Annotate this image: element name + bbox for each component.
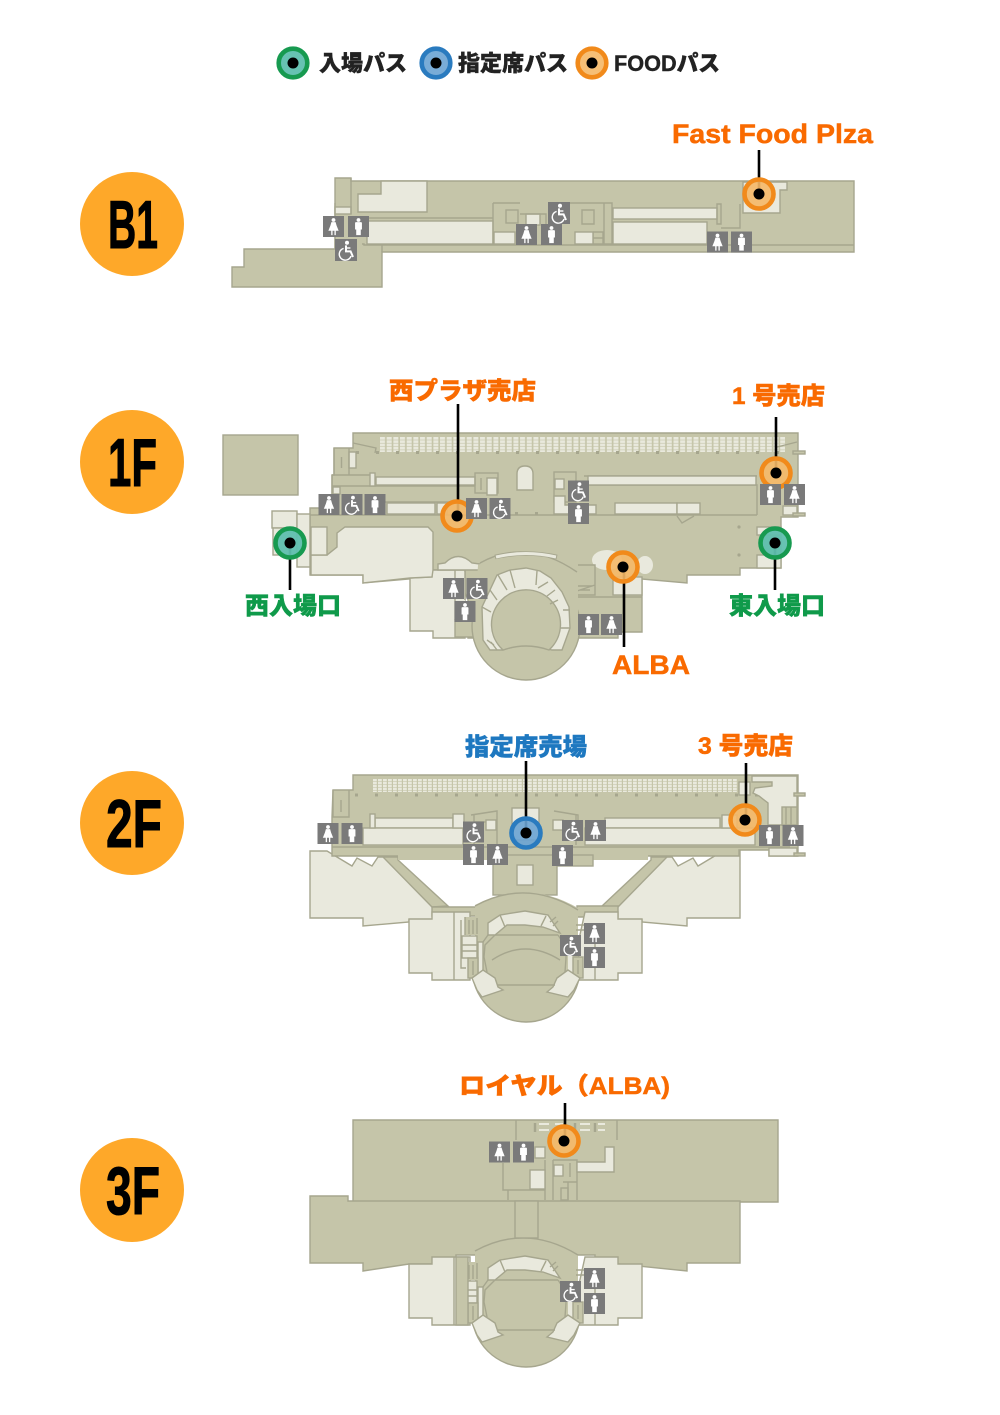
- label: shop no. 3: 3 号売店: [698, 733, 793, 760]
- label: east entrance: 東入場口: [729, 593, 825, 620]
- restroom icons: 1F: [318, 480, 805, 635]
- label: royal (ALBA): ロイヤル（ALBA): [459, 1073, 670, 1100]
- label: Fast Food Plza: Fast Food Plza: [672, 119, 874, 149]
- restroom icons: 3F: [489, 1142, 605, 1314]
- badge: 2F: 2F: [106, 786, 162, 862]
- badge: 3F: 3F: [106, 1153, 160, 1229]
- legend text: food pass: FOODパス: [614, 51, 720, 76]
- legend: [279, 49, 720, 77]
- marker: royal (ALBA): [550, 1103, 578, 1156]
- restroom icons: B1: [323, 202, 752, 261]
- marker: reserved seat counter: [512, 761, 540, 848]
- legend marker: food pass: [578, 49, 606, 77]
- legend text: entrance pass: 入場パス: [319, 51, 407, 76]
- marker: shop no. 1: [762, 417, 790, 488]
- floor plan: B1: [232, 178, 854, 287]
- legend marker: reserved seat pass: [422, 49, 450, 77]
- floor plan: 2F: [310, 761, 805, 1022]
- marker: ALBA: [608, 552, 638, 647]
- badge: 1F: [80, 410, 184, 514]
- label: west entrance: 西入場口: [245, 593, 341, 620]
- marker: shop no. 3: [730, 763, 760, 834]
- badge: 3F: [80, 1138, 184, 1242]
- label: shop no. 1: 1 号売店: [732, 383, 825, 410]
- marker: west entrance: [276, 528, 304, 590]
- floor plan: 1F: [223, 404, 805, 680]
- legend text: reserved seat pass: 指定席パス: [458, 51, 568, 76]
- badge: 1F: 1F: [108, 425, 157, 501]
- label: west plaza shop: 西プラザ売店: [389, 378, 536, 405]
- floor plan: 3F: [310, 1120, 778, 1367]
- label: reserved seat counter: 指定席売場: [465, 734, 587, 761]
- marker: west plaza shop: [442, 404, 472, 530]
- legend marker: entrance pass: [279, 49, 307, 77]
- restroom icons: 2F: [318, 820, 804, 968]
- badge: 2F: [80, 771, 184, 875]
- badge: B1: B1: [108, 187, 158, 263]
- marker: Fast Food Plaza: [744, 150, 774, 208]
- marker: east entrance: [760, 528, 790, 590]
- badge: B1: [80, 172, 184, 276]
- label: ALBA: ALBA: [612, 650, 690, 680]
